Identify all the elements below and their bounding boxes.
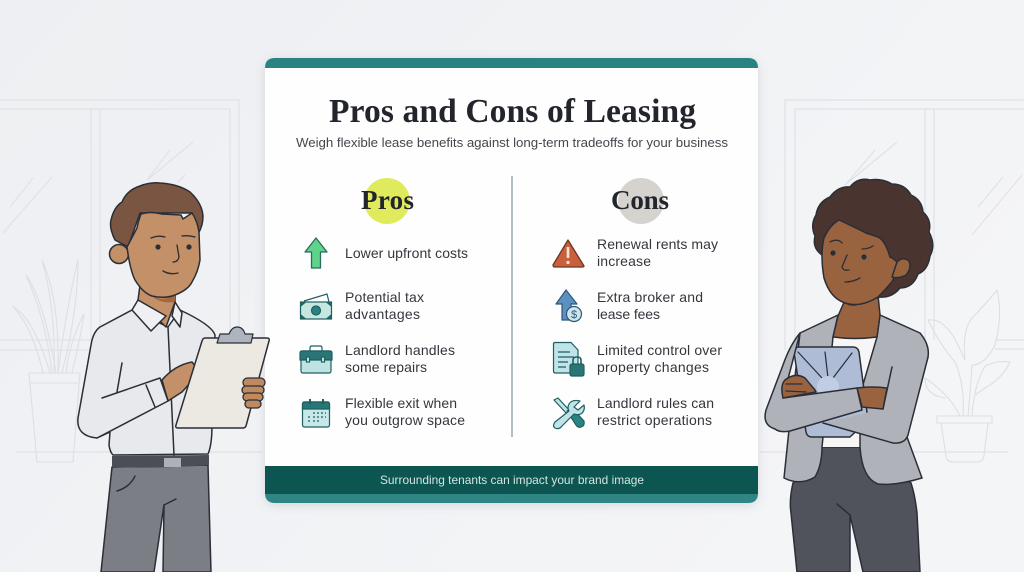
cons heading <box>611 178 669 224</box>
right plant <box>925 290 1010 462</box>
cons heading: Cons <box>611 185 669 215</box>
woman ear <box>892 259 910 278</box>
woman white top <box>822 337 877 447</box>
pro item: tax advantages <box>300 289 424 322</box>
pro item: lower upfront costs: Lower upfront costs <box>345 245 468 261</box>
man face <box>127 212 200 297</box>
card <box>265 58 758 503</box>
clipboard <box>176 327 269 428</box>
pro item: tax advantages: Potential tax <box>345 289 424 305</box>
con item: renewal rents <box>553 236 718 269</box>
woman blazer left panel <box>784 315 838 482</box>
footer text: Surrounding tenants can impact your brand image <box>380 473 644 487</box>
pro item: flexible exit: Flexible exit when <box>345 395 457 411</box>
icon: document with lock <box>554 342 584 376</box>
con item: renewal rents: increase <box>597 253 651 269</box>
floor line <box>16 451 1008 453</box>
con item: limited control: property changes <box>597 359 709 375</box>
column divider <box>511 176 513 437</box>
man gripping fingers <box>242 378 265 408</box>
icon: arrow with dollar coin: $ <box>571 309 577 321</box>
man forearm <box>97 378 168 438</box>
title: Pros and Cons of Leasing <box>329 93 696 130</box>
con item: limited control: Limited control over <box>597 342 722 358</box>
con item: broker fees <box>556 289 703 322</box>
woman left sleeve <box>765 333 862 432</box>
card top band <box>265 58 758 68</box>
man shirt details <box>117 327 174 455</box>
right window <box>785 100 1024 350</box>
con item: landlord rules <box>554 395 714 429</box>
pro item: lower upfront costs <box>305 238 468 268</box>
tablet <box>794 347 868 437</box>
woman forearm hand <box>857 387 887 409</box>
pro item: flexible exit <box>302 395 465 428</box>
icon: calendar <box>302 399 330 427</box>
icon: toolbox <box>300 346 332 373</box>
con item: broker fees: lease fees <box>597 306 660 322</box>
man belt <box>112 455 209 468</box>
man shirt <box>78 310 215 455</box>
footer band <box>265 466 758 503</box>
woman right sleeve <box>823 357 928 443</box>
man hand pointing <box>162 362 200 401</box>
icon: arrow with dollar coin <box>556 290 582 322</box>
pros heading: Pros <box>361 185 414 215</box>
pro item: landlord repairs: some repairs <box>345 359 427 375</box>
con item: renewal rents: Renewal rents may <box>597 236 718 252</box>
pro item: tax advantages: advantages <box>345 306 420 322</box>
man trousers <box>101 465 211 572</box>
woman figure <box>765 179 933 572</box>
con item: landlord rules: Landlord rules can <box>597 395 714 411</box>
left window <box>0 100 239 350</box>
woman trousers <box>790 447 920 572</box>
left plant <box>12 260 84 462</box>
man figure <box>78 183 269 572</box>
man ear <box>110 244 128 264</box>
icon: crossed tools <box>554 398 584 429</box>
subtitle: Weigh flexible lease benefits against long-term tradeoffs for your business <box>296 135 728 150</box>
woman hair <box>813 179 933 300</box>
icon: warning triangle <box>553 240 584 267</box>
man hair <box>110 183 203 247</box>
woman neck <box>833 295 880 338</box>
con item: landlord rules: restrict operations <box>597 412 712 428</box>
icon: banknotes <box>300 294 332 319</box>
woman left hand <box>782 375 816 398</box>
con item: limited control <box>554 342 722 376</box>
pro item: landlord repairs: Landlord handles <box>345 342 455 358</box>
card panel <box>265 58 758 503</box>
pros heading <box>361 178 414 224</box>
pro item: flexible exit: you outgrow space <box>345 412 465 428</box>
icon: green up arrow <box>305 238 327 268</box>
con item: broker fees: Extra broker and <box>597 289 703 305</box>
man facial features <box>151 236 195 274</box>
man collar <box>132 300 182 331</box>
woman blazer right panel <box>860 315 928 484</box>
woman face <box>822 220 897 305</box>
man neck <box>138 285 175 327</box>
woman facial features <box>830 240 873 282</box>
pro item: landlord repairs <box>300 342 455 375</box>
